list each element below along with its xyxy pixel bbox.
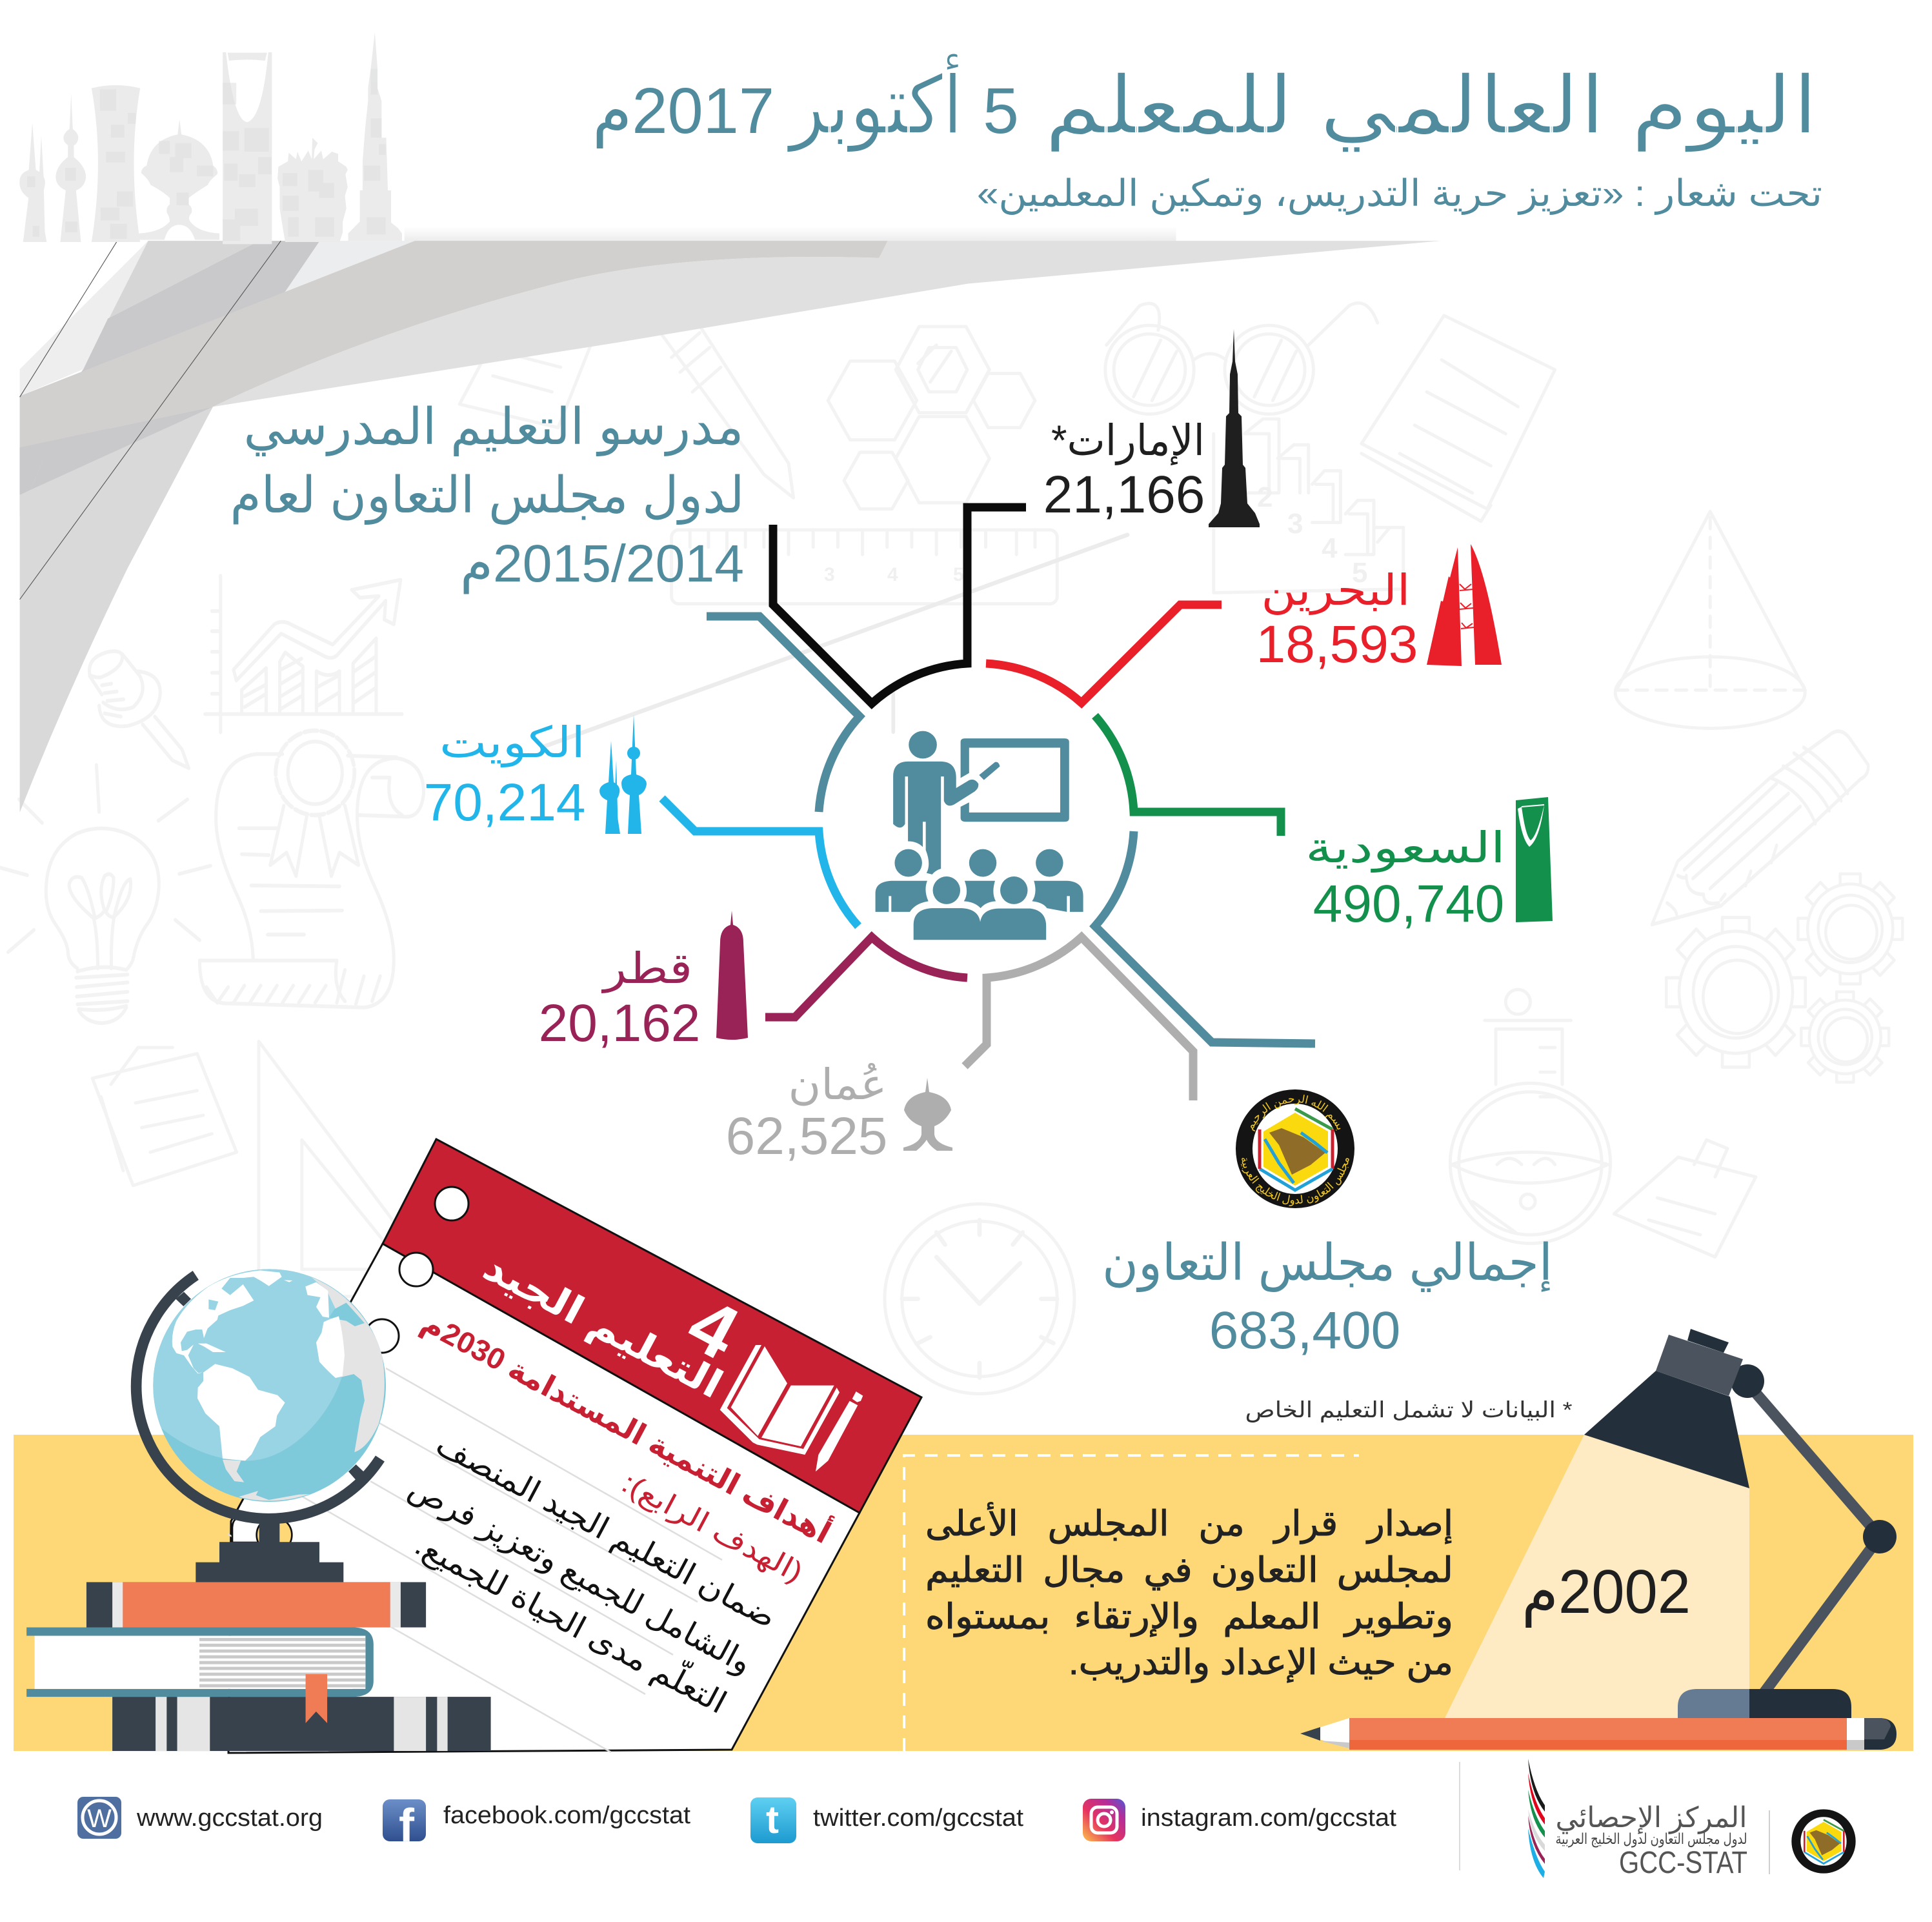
goal number: (الهدف الرابع): <box>616 1467 808 1589</box>
decision line 4: من حيث الإعداد والتدريب. <box>1069 1643 1453 1683</box>
UAE name: الإمارات* <box>1051 416 1205 465</box>
doodles: large pencil and gears <box>1652 731 1902 1082</box>
stand hole right <box>257 1517 292 1553</box>
stand hole left <box>232 1519 260 1543</box>
decision line 3: وتطوير المعلم والإرتقاء بمستواه <box>925 1597 1453 1637</box>
panel: Qatar <box>539 911 748 1053</box>
ring brackets <box>176 1292 363 1480</box>
doodle: lower gear <box>1801 992 1889 1082</box>
doodle digits: 2 <box>1257 481 1273 513</box>
logo Arabic subtitle: لدول مجلس التعاون لدول الخليج العربية <box>1555 1830 1747 1848</box>
total label: إجمالي مجلس التعاون <box>1102 1234 1553 1293</box>
connector: Bahrain red <box>986 605 1222 703</box>
Qatar value: 20,162 <box>539 994 700 1053</box>
card heading: التعليم الجيد <box>476 1244 730 1408</box>
doodles: chart, pin, bulb, scroll <box>0 576 424 1023</box>
connector: Qatar purple <box>765 937 967 1017</box>
doodle: glasses <box>1105 303 1378 414</box>
doodle: long diagonal <box>543 535 1127 747</box>
connector: total teal <box>1095 831 1315 1044</box>
doodle: flask <box>1450 989 1611 1244</box>
doodle: ruler <box>672 530 1057 604</box>
panel: Bahrain <box>1256 544 1502 674</box>
heading line 2: لدول مجلس التعاون لعام <box>230 467 745 525</box>
skyline: Kuwait tower small <box>19 123 46 242</box>
skyline: mosaic patches <box>27 69 386 241</box>
card body <box>228 1244 860 1753</box>
doodle: clock <box>885 1204 1074 1394</box>
icon: facebook <box>383 1799 426 1852</box>
title day: 5 <box>983 75 1019 147</box>
doodle: paper <box>459 310 595 428</box>
skyline: Kuwait tower tall <box>55 94 86 242</box>
icon: teacher and students <box>876 731 1083 940</box>
grey swoosh ribbons <box>20 227 1441 813</box>
doodle digits: 5 <box>1352 557 1367 589</box>
Kuwait value: 70,214 <box>424 773 585 832</box>
heading line 1: مدرسو التعليم المدرسي <box>244 398 743 457</box>
SDG goals heading: أهداف التنمية المستدامة 2030م <box>416 1303 838 1550</box>
skyline: Burj <box>348 32 402 241</box>
instagram link: instagram.com/gccstat <box>1141 1805 1396 1832</box>
card number 4: 4 <box>674 1281 752 1377</box>
doodle digits: 5 <box>953 564 964 585</box>
panel: GCC-STAT logo <box>1528 1759 1856 1880</box>
doodle: notebook <box>1362 316 1555 521</box>
Kuwait name: الكويت <box>439 718 585 767</box>
student bodies <box>876 881 1083 940</box>
footer divider <box>1459 1762 1460 1870</box>
goal line 3: التعلّم مدى الحياة للجميع. <box>409 1521 735 1721</box>
background doodles <box>92 303 1805 1394</box>
swoosh: thin line 2 <box>20 241 281 600</box>
goal line 1: ضمان التعليم الجيد المنصف <box>430 1427 781 1636</box>
logo ribbon <box>1528 1759 1545 1878</box>
swoosh: fade strip <box>405 227 1176 241</box>
doodle digits: 4 <box>1322 532 1338 564</box>
doodle: papers <box>92 1047 237 1186</box>
heading line 3: 2015/2014م <box>460 534 744 594</box>
lamp cap <box>1687 1329 1729 1353</box>
icon: GCC emblem <box>1236 1089 1354 1208</box>
icon: GCC emblem: بسم الله الرحمن الرحيم <box>1251 1095 1341 1132</box>
book: teal with pages <box>26 1628 374 1697</box>
doodle: vertical tick <box>892 690 894 732</box>
Bahrain name: البحرين <box>1261 566 1411 615</box>
doodle: light bulb <box>0 765 210 1023</box>
title words: اليوم العالمي للمعلم <box>1044 61 1818 153</box>
Oman value: 62,525 <box>726 1107 887 1166</box>
doodle: push pin <box>89 651 189 768</box>
logo divider <box>1769 1810 1770 1874</box>
doodle: hexagons <box>828 327 1035 509</box>
icon: instagram <box>1083 1799 1125 1841</box>
panel: GCC total <box>1102 1234 1553 1360</box>
lamp shade <box>1584 1371 1749 1488</box>
swoosh: light left panel <box>20 241 148 396</box>
swoosh: cut under lower-left corner <box>20 444 50 516</box>
Oman name: عُمان <box>789 1060 887 1108</box>
icon: Kingdom tower <box>1516 797 1553 922</box>
globe ring <box>136 1275 380 1519</box>
panel: decision text <box>925 1502 1453 1683</box>
title month: أكتوبر <box>787 53 963 153</box>
panel: SDG card <box>228 1139 921 1753</box>
swoosh: light panel 2 <box>285 241 415 292</box>
doodle: chart <box>205 576 402 732</box>
footnote: * البيانات لا تشمل التعليم الخاص <box>1245 1398 1572 1423</box>
pointer <box>979 762 1000 780</box>
lamp head <box>1656 1335 1743 1396</box>
student heads <box>894 849 1063 904</box>
book: dark bottom <box>112 1697 491 1751</box>
icon: globe <box>136 1259 389 1583</box>
connector: UAE black <box>773 507 1026 703</box>
doodle: pencil <box>660 303 794 498</box>
doodle digits: 4 <box>887 564 898 585</box>
doodle digits: 3 <box>1287 508 1303 540</box>
doodle: upper gear <box>1798 874 1902 984</box>
icon: GCC emblem: مجلس التعاون لدول الخليج العربية <box>1240 1158 1349 1206</box>
title year: 2017م <box>592 75 774 148</box>
lamp elbow <box>1863 1520 1897 1553</box>
Bahrain value: 18,593 <box>1256 615 1418 674</box>
lamp base right <box>1749 1689 1851 1718</box>
connector lines ring <box>662 507 1315 1100</box>
connector: Oman grey <box>965 937 1193 1100</box>
lamp base left <box>1678 1689 1749 1718</box>
skyline: dome arch <box>165 225 195 240</box>
panel: UAE <box>1043 329 1260 527</box>
facebook link: facebook.com/gccstat <box>443 1802 690 1829</box>
title <box>592 53 1818 153</box>
UAE value: 21,166 <box>1043 465 1205 524</box>
swoosh: lower left <box>20 407 213 813</box>
subtitle: تحت شعار : «تعزيز حرية التدريس، وتمكين المعلمين» <box>977 173 1822 215</box>
lamp arm <box>1746 1382 1880 1694</box>
panel: social footer <box>77 1797 1396 1852</box>
connector: heading teal <box>707 616 860 812</box>
board <box>961 738 1069 822</box>
icon: wordpress <box>77 1797 121 1839</box>
skyline silhouette <box>19 32 402 244</box>
panel: Saudi Arabia <box>1305 797 1553 933</box>
card holes <box>365 1187 468 1353</box>
skyline: Kingdom tower <box>223 52 272 244</box>
yellow band <box>14 1435 1913 1751</box>
doodle: big gear <box>1666 918 1806 1067</box>
skyline: Kuwait thin spike <box>37 136 45 242</box>
goal line 2: والشامل للجميع وتعزيز فرص <box>403 1471 758 1681</box>
swoosh: thin line 1 <box>20 241 117 397</box>
doodle: cone <box>1615 511 1805 728</box>
teacher body <box>893 762 978 875</box>
website: www.gccstat.org <box>136 1805 323 1832</box>
doodle: triangle <box>259 1041 439 1297</box>
skyline: curved tower <box>92 85 140 242</box>
lamp light beam <box>1445 1435 1749 1718</box>
icon: stacked books <box>26 1582 491 1751</box>
icon: Kuwait towers <box>599 714 647 834</box>
skyline: dome <box>139 119 219 240</box>
book: orange <box>86 1582 426 1628</box>
connector: Saudi green <box>1095 716 1281 836</box>
doodle: scroll certificate <box>199 731 424 1007</box>
Saudi value: 490,740 <box>1313 875 1504 933</box>
logo Arabic name: المركز الإحصائي <box>1555 1802 1747 1834</box>
skyline: clock block <box>277 137 348 242</box>
dashed frame <box>904 1455 1359 1751</box>
total value: 683,400 <box>1209 1301 1400 1360</box>
connector: Kuwait cyan <box>662 798 858 926</box>
doodle digits: 3 <box>824 564 835 585</box>
icon: Bahrain towers <box>1427 544 1502 666</box>
icon: pencil <box>1300 1718 1897 1750</box>
panel: teachers heading <box>230 398 745 594</box>
bookmark <box>306 1674 327 1723</box>
icon: Oman monument <box>903 1078 952 1151</box>
year 2002: 2002م <box>1522 1557 1691 1628</box>
card red header <box>383 1139 921 1513</box>
icon: facebook: f <box>399 1800 415 1852</box>
swoosh: warm band <box>20 241 888 447</box>
icon: twitter: t <box>766 1798 779 1841</box>
icon: wordpress: W <box>87 1805 112 1833</box>
globe sphere <box>144 1259 389 1504</box>
swoosh: grey band <box>20 241 320 495</box>
panel: Kuwait <box>424 714 647 834</box>
doodle: number cubes <box>1214 419 1404 592</box>
small emblem <box>1791 1809 1856 1874</box>
Saudi name: السعودية <box>1305 824 1505 873</box>
twitter link: twitter.com/gccstat <box>813 1805 1023 1832</box>
icon: twitter <box>750 1797 796 1843</box>
icon: open book and pencil <box>720 1345 863 1472</box>
icon: Burj Khalifa <box>1209 329 1260 527</box>
doodle: sticky note <box>1614 1140 1756 1257</box>
swoosh: mid grey band <box>83 241 259 369</box>
Qatar name: قطر <box>601 944 692 993</box>
skyline: Kingdom bridge <box>228 53 267 61</box>
swoosh: overlap <box>20 407 213 495</box>
icon: Qatar tower <box>716 911 748 1040</box>
teacher head <box>909 731 937 758</box>
panel: Oman <box>726 1060 952 1166</box>
doodle digits <box>824 481 1367 589</box>
decision line 1: إصدار قرار من المجلس الأعلى <box>925 1502 1453 1544</box>
lamp joint <box>1731 1364 1764 1398</box>
globe stand <box>196 1522 343 1583</box>
card ruled lines <box>228 1368 722 1752</box>
swoosh: light long band <box>213 241 1441 407</box>
doodle: large pencil <box>1652 731 1868 925</box>
decision line 2: لمجلس التعاون في مجال التعليم <box>925 1551 1453 1590</box>
icon: desk lamp <box>1584 1329 1897 1718</box>
logo GCC-STAT: GCC-STAT <box>1619 1846 1747 1880</box>
